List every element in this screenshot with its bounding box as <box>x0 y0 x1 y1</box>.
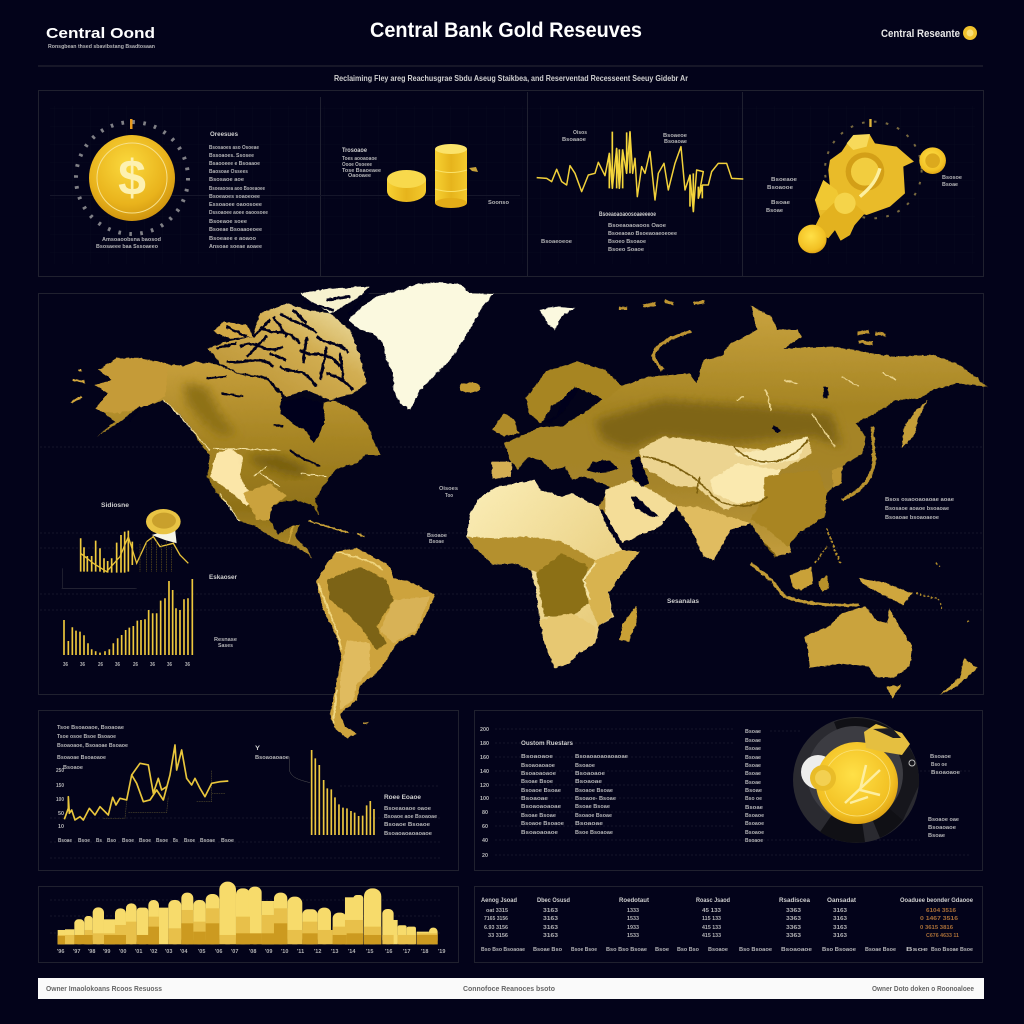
x axis labels: Bsoe <box>184 838 195 844</box>
table footer row: Bso Bso <box>677 947 700 953</box>
text: bar labels: Y <box>255 746 260 752</box>
text: coin labels: Bsoaoe oae <box>928 817 959 823</box>
x axis labels: Bs <box>173 838 178 844</box>
table rows: 1533 <box>627 933 639 939</box>
axis labels: 120 <box>480 783 489 789</box>
table: second column: Bsoe Bsoaoae <box>575 830 613 836</box>
New Zealand and Tasmania <box>940 658 977 695</box>
table: third column: Bsoae <box>745 788 762 794</box>
Madagascar <box>620 606 637 642</box>
axis labels: 100 <box>480 796 489 802</box>
table: third column: Bsoaoe <box>745 838 763 844</box>
main title: Central Bank Gold Reseuves <box>370 19 642 42</box>
text: cylinder labels: Oaooaee <box>348 173 371 179</box>
Japan and Korea <box>842 427 874 500</box>
Scandinavia <box>526 362 622 423</box>
text: chart description: Tsoe Bsoaoaoe, Bsoaoae <box>57 725 124 731</box>
icon: dollar coin with dial: Bsosaeee baa Sssoaeeo <box>96 244 159 250</box>
text: cylinder labels: Trosoaoe <box>342 148 368 154</box>
table: second column <box>575 754 628 836</box>
text list: coin notes: Essoaoee oaoosoee <box>209 202 262 208</box>
chart: declining bars <box>289 750 374 835</box>
panel: line and bar charts <box>38 710 458 870</box>
Alaska islands <box>72 371 85 403</box>
chart: lower bars <box>64 579 192 655</box>
text: bar labels: Bsoaoaoaoe <box>255 755 289 761</box>
text: waveform labels: Bsoeaoao Bsoeaoaeoeoee <box>608 231 677 237</box>
table rows: 3163 <box>543 908 558 914</box>
text: waveform labels <box>541 130 687 253</box>
x axis labels: '97 <box>73 949 80 955</box>
India <box>676 507 751 560</box>
axis labels: 40 <box>482 838 488 844</box>
chart axis labels: 36 <box>167 662 172 668</box>
subtitle: Reclaiming Fley areg Reachusgrae Sbdu Aseug Staikbea, and Reserventad Recesseent Seeuy Gidebr Ar <box>334 74 688 83</box>
table rows: 6.93 3156 <box>484 925 508 931</box>
text: mechanism labels: Bsosoe <box>942 175 962 181</box>
table: third column <box>745 729 764 844</box>
text: chart description: Bsoaoaoe, Bsoaoae Bsoaoe <box>57 743 128 749</box>
axis labels: 60 <box>482 824 488 830</box>
text: mechanism labels: Bsoaooe <box>767 185 793 191</box>
x axis labels: '12 <box>314 949 321 955</box>
icon: dollar coin with dial: $ <box>118 150 146 206</box>
table rows: 3163 <box>833 933 847 939</box>
chart axis labels: 36 <box>185 662 190 668</box>
x axis labels: '09 <box>265 949 272 955</box>
table: third column: Bsoaoe <box>745 830 764 836</box>
text list: coin notes: Bsaooeee e Bsoaaoe <box>209 161 260 167</box>
table: third column: Bsoae <box>745 729 761 735</box>
dark base layers <box>58 923 438 944</box>
map labels: Bsosaoe aoaoe bsoaoae <box>885 506 949 512</box>
x axis labels: Bsoae <box>200 838 215 844</box>
text: chart description: Tsoe osoe Bsoe Bsoaoe <box>57 734 116 740</box>
map labels: Oisoes <box>439 486 458 492</box>
x axis labels: '16 <box>385 949 392 955</box>
x axis labels: '10 <box>281 949 288 955</box>
text: bar labels: Bsoaoaoaoaoaoe <box>384 831 432 837</box>
table: second column: Bsoaoe Bsoae <box>575 813 612 819</box>
header <box>38 19 983 83</box>
x axis labels: '98 <box>88 949 95 955</box>
table: third column: Bsoae <box>745 763 761 769</box>
text: waveform labels: Bsoeaoaoaoosoaeeeeoe <box>599 212 657 218</box>
icon: gold mechanism <box>798 119 946 253</box>
text: mechanism labels: Bsoae <box>942 182 958 188</box>
table: third column: Bsoae <box>745 746 761 752</box>
text: waveform labels: Bsoaaoe <box>562 137 586 143</box>
text list: coin notes: Baosoae Ossees <box>209 169 248 175</box>
y axis labels: 150 <box>56 783 64 789</box>
text list: coin notes: Dssoaoee aoee oaoosoee <box>209 210 268 216</box>
axis labels: 200 <box>480 727 489 733</box>
table: second column: Bsoaoae <box>575 779 602 785</box>
x axis labels: '11 <box>297 949 304 955</box>
map labels: Bsoaoe <box>427 533 447 539</box>
brand title: Central Oond <box>46 25 155 42</box>
panel: table with coin <box>474 710 982 870</box>
icon: gold coin on dark disc <box>793 717 919 843</box>
Iceland <box>459 382 481 392</box>
footer bar: Owner Doto doken o Roonoaloee <box>872 986 974 993</box>
text: waveform labels: Oisos <box>573 130 587 136</box>
text: waveform labels: Bsoeaoaoaoos Oaoe <box>608 223 666 229</box>
text: waveform labels: Bsoaoae <box>664 139 687 145</box>
axis labels <box>480 727 489 859</box>
x axis labels: Bsoae <box>58 838 72 844</box>
table headers: Ooaduee beonder Gdaooe <box>900 898 974 904</box>
text list: coin notes: Bsoeaee e aoaoo <box>209 236 257 242</box>
table footer row: Bso Bsoaoe <box>822 947 856 953</box>
table footer row <box>481 947 973 953</box>
table rows: 115 133 <box>702 916 721 922</box>
text: chart description <box>57 725 128 771</box>
table: second column: Bsoaoe- Bsoae <box>575 796 616 802</box>
x axis labels: '05 <box>198 949 205 955</box>
map labels: Bsoaoae bsoaoaeoe <box>885 515 939 521</box>
x axis labels: '14 <box>348 949 356 955</box>
axis labels: 80 <box>482 810 488 816</box>
table footer row: Bsoe <box>655 947 669 953</box>
x axis labels: '02 <box>150 949 157 955</box>
map labels: Eskaoser <box>209 575 238 581</box>
chart axis labels: 26 <box>133 662 138 668</box>
footer bar <box>38 978 984 999</box>
x axis labels: '15 <box>366 949 373 955</box>
New Guinea <box>859 578 913 605</box>
table headers: Aenog Jsoad <box>481 898 517 904</box>
text: bar labels: Bsoaoe aoe Bsoaoae <box>384 814 437 820</box>
table rows: C676 4633 11 <box>926 933 959 939</box>
x axis labels: Bsoe <box>139 838 151 844</box>
x axis labels: Bsoe <box>122 838 134 844</box>
table: second column: Bsoaoe Bsoae <box>575 788 613 794</box>
chart axis labels: 26 <box>98 662 103 668</box>
table headers: Rsadiscea <box>779 898 811 904</box>
chart axis labels: 36 <box>80 662 85 668</box>
map labels <box>101 486 954 649</box>
Britain and Ireland <box>492 413 519 437</box>
table rows: 0 1467 3516 <box>920 916 958 922</box>
table footer row: Bsoe <box>906 947 928 953</box>
chart: stacked bars <box>58 882 438 944</box>
South America <box>317 548 435 738</box>
footer bar: Owner Imaolokoans Rcoos Resuoss <box>46 986 162 993</box>
text: coin labels: Bsoaoe <box>930 754 951 760</box>
Caribbean and Central America <box>288 521 365 543</box>
table: second column: Bsoae Bsoae <box>575 804 610 810</box>
Middle East and Central Asia highlands <box>639 437 812 510</box>
table rows: 1933 <box>627 925 639 931</box>
table: first column: Bsoaoe Bsoaoe <box>521 821 564 827</box>
x axis labels: '99 <box>103 949 110 955</box>
icon: dollar coin with dial: Amsoaoobsna baosod <box>102 237 161 243</box>
text list: coin notes <box>209 132 268 250</box>
map labels: Too <box>445 493 454 499</box>
x axis labels: Bsoe <box>221 838 234 844</box>
table: first column: Bsoaoaoaoe <box>521 830 558 836</box>
x axis labels: '07 <box>231 949 238 955</box>
table rows: 3363 <box>786 925 801 931</box>
y axis labels <box>56 768 64 830</box>
chart: gold line <box>64 745 228 820</box>
axis labels: 160 <box>480 755 489 761</box>
table footer row: Bso Bso Bsoae <box>606 947 647 953</box>
text list: coin notes: Bsoeae Bsoaaoeoee <box>209 227 262 233</box>
table footer row: Bsoae Bsoe <box>865 947 896 953</box>
table: third column: Bso oe <box>745 796 762 802</box>
chart: upper bars with coin <box>62 509 188 588</box>
map labels: Bsos osaooaoaoae aoae <box>885 497 954 503</box>
chart axis labels: 36 <box>115 662 120 668</box>
table rows <box>484 908 959 939</box>
table: first column: Bsoae Bsoe <box>521 779 553 785</box>
map labels: Sases <box>218 643 233 649</box>
middle tone layers <box>58 908 438 944</box>
Arctic islands and Novaya Zemlya <box>619 301 886 370</box>
icon: gold cylinders <box>387 144 478 208</box>
light top layers <box>58 882 438 944</box>
y axis labels: 250 <box>56 768 64 774</box>
text list: coin notes: Bsosaoes aso Osoeae <box>209 145 259 151</box>
axis labels: 140 <box>480 769 489 775</box>
table headers: Roedotaut <box>619 898 649 904</box>
table: second column: Bsoaoe <box>575 763 595 769</box>
table: first column: Bsoaoe Bsoae <box>521 788 561 794</box>
y axis labels: 100 <box>56 797 64 803</box>
table rows: 0 3615 3816 <box>920 925 953 931</box>
x axis labels: '04 <box>180 949 188 955</box>
table: second column: Bsoaoaoaoaoaoae <box>575 754 628 760</box>
table rows: 3163 <box>833 925 847 931</box>
table footer row: Bso Bso Bsoaoae <box>481 947 525 953</box>
y axis labels: 50 <box>58 811 64 817</box>
text: bar labels <box>255 746 437 837</box>
map: Europe, Asia, Africa, Oceania <box>467 301 987 698</box>
table: first column: Bsoaoaoaoe <box>521 771 556 777</box>
text: mechanism labels: Bsoeaoe <box>771 177 797 183</box>
North America <box>95 358 381 558</box>
x axis labels: '96 <box>57 949 64 955</box>
table headers: Roasc Jsaod <box>696 898 730 904</box>
x axis labels <box>58 838 234 844</box>
chart axis labels: 36 <box>63 662 68 668</box>
x axis labels: Bs <box>96 838 102 844</box>
Spain <box>492 462 512 479</box>
table rows: 3363 <box>786 933 801 939</box>
text: coin labels <box>928 754 960 839</box>
axis labels: 20 <box>482 853 488 859</box>
table rows: 3363 <box>786 916 801 922</box>
text: chart description: Bsoaoe <box>63 765 83 771</box>
text: waveform labels: Bsoaeoeoe <box>541 239 572 245</box>
table headers: Dbec Osusd <box>537 898 570 904</box>
x axis labels: '08 <box>249 949 256 955</box>
text: waveform labels: Bsoaeoe <box>663 133 687 139</box>
chart axis labels <box>63 662 190 668</box>
table title: Oustom Ruestars <box>521 741 574 747</box>
panel: stacked gold bars <box>38 882 458 962</box>
text list: coin notes: Bsoeaoe soee <box>209 219 247 225</box>
Kamchatka and Sakhalin <box>901 400 928 448</box>
table rows: 3163 <box>833 908 847 914</box>
table: third column: Bsoae <box>745 738 761 744</box>
x axis labels: '01 <box>135 949 142 955</box>
table: third column: Bsoae <box>745 755 761 761</box>
Eurasia <box>504 305 987 560</box>
x axis labels: '03 <box>165 949 172 955</box>
table: second column: Bsoaoaoe <box>575 771 605 777</box>
text: cylinder labels: Soonso <box>488 200 510 206</box>
table rows: 7165 3156 <box>484 916 508 922</box>
Arctic islands <box>208 287 370 400</box>
table rows: 3163 <box>543 925 558 931</box>
x axis labels: Bso <box>107 838 117 844</box>
Svalbard <box>539 307 575 330</box>
table footer row: Bso Bsoae Bsoe <box>931 947 973 953</box>
panel: world map <box>38 283 987 738</box>
map: Americas and Greenland <box>72 283 493 738</box>
brand subtitle: Ronsgbean thsed sbavibstang Bsadtosaan <box>48 44 156 50</box>
table rows: 45 133 <box>702 908 721 914</box>
header badge: Central Reseante <box>881 28 960 40</box>
panel: data table <box>474 886 982 962</box>
y axis labels: 10 <box>58 824 64 830</box>
Pacific islands <box>916 563 970 622</box>
text: chart description: Bsoaoae Bsoaoaoe <box>57 755 106 761</box>
table: first column: Bsoae Bsoae <box>521 813 556 819</box>
text: waveform labels: Bsoeo Soaoe <box>608 247 644 253</box>
x axis labels: '17 <box>403 949 410 955</box>
Seas and lakes <box>543 387 826 545</box>
table footer row: Bsoaoaoe <box>781 947 812 953</box>
Philippines <box>815 528 840 563</box>
table: third column: Bsoae <box>745 805 763 811</box>
text: bar labels: Bsoeaoaoe oaoe <box>384 806 431 812</box>
text: mechanism labels <box>766 175 962 214</box>
table footer row: Bsoaoe <box>708 947 728 953</box>
x axis labels: '00 <box>119 949 126 955</box>
table rows: oat 3315 <box>486 908 508 914</box>
x axis labels <box>57 949 445 955</box>
table: second column: Bsoaoae <box>575 821 603 827</box>
text: coin labels: Bso oe <box>931 762 947 768</box>
text: waveform labels: Bsoeo Bsoaoe <box>608 239 646 245</box>
map labels: Sidiosne <box>101 503 130 509</box>
map labels: Resnase <box>214 637 237 643</box>
table rows: 6104 3516 <box>926 908 956 914</box>
icon: dollar coin with dial <box>76 119 188 250</box>
table rows: 3363 <box>786 908 801 914</box>
table rows: 3163 <box>543 916 558 922</box>
text list: coin notes: Oreesues <box>210 132 239 138</box>
Falklands <box>363 720 368 725</box>
table footer row: Bso Bsoaoe <box>739 947 772 953</box>
table rows: 33 3156 <box>488 933 508 939</box>
map labels: Bsoae <box>429 539 444 545</box>
table rows: 3163 <box>543 933 558 939</box>
text: bar labels: Bsoaoe Bsoaoe <box>384 822 430 828</box>
Africa <box>467 480 639 668</box>
table footer row: Bsoe Bsoe <box>571 947 597 953</box>
text list: coin notes: Bsoeaooea aoo Bsoeaoee <box>209 186 265 192</box>
table: third column: Bsoaoe <box>745 813 764 819</box>
table: first column: Bsoaoaoe <box>521 754 553 760</box>
text: mechanism labels: Bsoae <box>771 200 790 206</box>
table: first column <box>521 754 564 836</box>
text: coin labels: Bsoae <box>928 833 945 839</box>
Australia <box>805 607 912 678</box>
text: cylinder labels: Tose Bsaoeaee <box>342 168 381 174</box>
x axis labels: '19 <box>438 949 445 955</box>
x axis labels: '06 <box>215 949 222 955</box>
text: coin labels: Bsoaoaoe <box>931 770 960 776</box>
text: cylinder labels <box>342 148 510 206</box>
Indonesia <box>751 563 859 605</box>
text list: coin notes: Bsoeaoes soaoeoee <box>209 194 260 200</box>
x axis labels: Bsoe <box>156 838 168 844</box>
text: cylinder labels: Oooe Osoeee <box>342 162 372 168</box>
table footer row: Bsoae Bso <box>533 947 563 953</box>
text list: coin notes: Bssoaoes. Ssosee <box>209 153 254 159</box>
footer bar: Connofoce Reanoces bsoto <box>463 986 555 993</box>
x axis labels: '13 <box>331 949 338 955</box>
table rows: 415 133 <box>702 925 721 931</box>
text: bar labels: Roee Eoaoe <box>384 795 422 801</box>
icon: coin on chart <box>146 509 181 543</box>
table rows: 3163 <box>833 916 847 922</box>
Greenland <box>348 283 493 410</box>
text: cylinder labels: Toes aooaoaoe <box>342 156 377 162</box>
text: mechanism labels: Bsoae <box>766 208 783 214</box>
China and Southeast Asia <box>751 470 827 547</box>
table rows: 1333 <box>627 908 639 914</box>
map labels: Sesanalas <box>667 599 700 605</box>
panel: top overview strip <box>38 90 984 277</box>
text list: coin notes: Ansoae soeae aoaee <box>209 244 262 250</box>
chart axis labels: 36 <box>150 662 155 668</box>
text list: coin notes: Bsosaoe aoe <box>209 177 244 183</box>
table headers: Oansadat <box>827 898 856 904</box>
table headers <box>481 898 974 904</box>
chart: waveform line <box>537 132 743 212</box>
table: first column: Bsoaoaoaoae <box>521 804 561 810</box>
table: third column: Bsoae <box>745 780 761 786</box>
table: third column: Bsoae <box>745 771 761 777</box>
x axis labels: Bsoe <box>78 838 90 844</box>
table rows: 1533 <box>627 916 639 922</box>
x axis labels: '18 <box>421 949 428 955</box>
axis labels: 180 <box>480 741 489 747</box>
table: first column: Bsoaoae <box>521 796 548 802</box>
Hudson Bay <box>280 397 325 443</box>
table: first column: Bsoaoaoaoe <box>521 763 555 769</box>
table rows: 415 133 <box>702 933 721 939</box>
text: coin labels: Bsoaoaoe <box>928 825 956 831</box>
table: third column: Bsoaoe <box>745 821 764 827</box>
